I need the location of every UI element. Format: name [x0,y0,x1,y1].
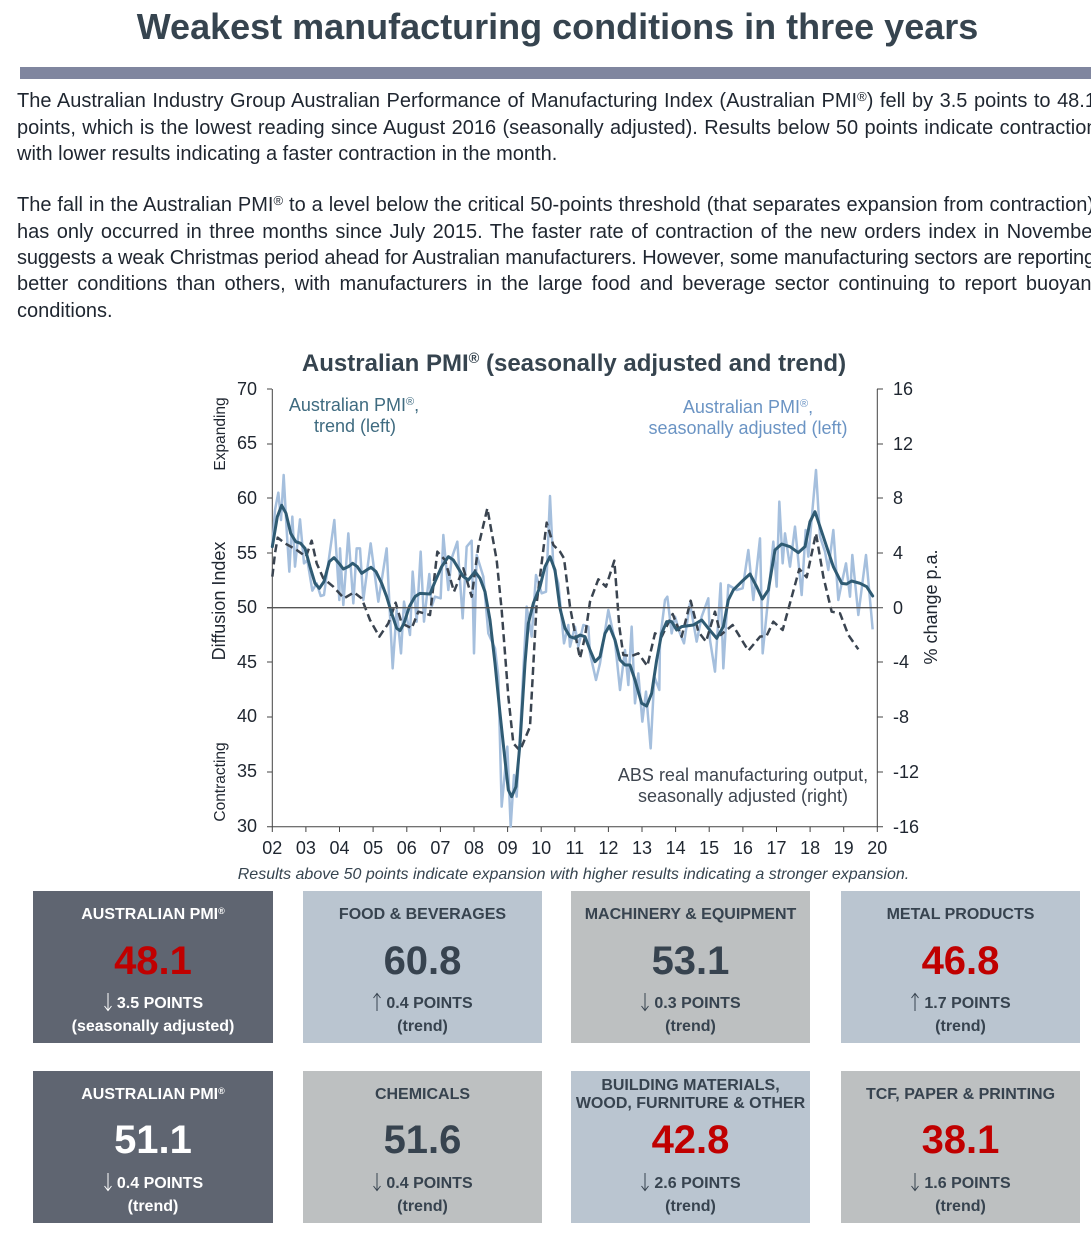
left axis labels: 35 [237,761,257,781]
series: seasonally adjusted PMI [272,470,873,827]
year axis labels: 05 [363,838,383,858]
card: Machinery & Equipment: MACHINERY & EQUIPMENT [585,906,796,923]
year axis labels: 06 [397,838,417,858]
card: Metal Products: 46.8 [922,939,999,983]
chart title: (seasonally adjusted and trend) [479,350,846,377]
year axis labels: 15 [699,838,719,858]
card: Chemicals: (trend) [397,1198,448,1215]
card: TCF, Paper & Printing: 1.6 POINTS [924,1175,1011,1192]
left axis labels: 40 [237,706,257,726]
text block: intro paragraph 1: points, which is the lowest reading since August 2016 (seasonally adjusted). Results below 50 points indicate contraction, [17,117,1091,139]
year axis labels: 13 [632,838,652,858]
left axis labels: 55 [237,543,257,563]
text block: intro paragraph 1 [17,89,1091,165]
card: Metal Products [841,891,1080,1043]
axis label: Contracting: Contracting [212,742,229,822]
right axis labels [893,379,919,837]
left axis labels: 30 [237,816,257,836]
card: TCF, Paper & Printing: TCF, PAPER & PRINTING [866,1086,1055,1103]
year axis labels: 16 [733,838,753,858]
left axis labels: 45 [237,652,257,672]
left axis labels: 60 [237,488,257,508]
right axis labels: -16 [893,817,919,837]
card: Australian PMI seasonally adjusted: 3.5 POINTS [117,995,203,1012]
right axis labels: -12 [893,762,919,782]
card: Australian PMI trend [33,1071,273,1223]
card: Machinery & Equipment: 53.1 [652,939,729,983]
year axis labels: 03 [296,838,316,858]
label: ABS output: seasonally adjusted (right) [638,786,848,806]
card: Machinery & Equipment: 0.3 POINTS [654,995,741,1012]
label: trend: , [414,395,419,415]
year axis labels: 11 [565,838,584,858]
header rule [20,67,1091,79]
card: Chemicals: 51.6 [384,1118,461,1162]
card: Chemicals: CHEMICALS [375,1086,470,1103]
right axis labels: 0 [893,598,903,618]
year axis labels: 20 [867,838,887,858]
text block: intro paragraph 1: The Australian Industry Group Australian Performance of Manufacturing Index (Australian PMI®) fell by 3.5 points to 48.1 [17,89,1091,112]
card: Chemicals [303,1071,542,1223]
card: Food & Beverages: 0.4 POINTS [386,995,473,1012]
chart axes [267,389,883,832]
series: ABS real manufacturing output (dashed) [272,508,858,751]
label: trend: trend (left) [314,416,396,436]
year axis labels: 10 [531,838,551,858]
year axis labels: 12 [598,838,618,858]
card: Machinery & Equipment [571,891,810,1043]
right axis labels: 4 [893,543,903,563]
label: ABS output: ABS real manufacturing output, [618,765,868,785]
label: trend: Australian PMI [289,395,419,415]
left axis labels: 70 [237,379,257,399]
left axis labels: 50 [237,597,257,617]
card: TCF, Paper & Printing: 38.1 [922,1118,999,1162]
card: Australian PMI trend: AUSTRALIAN PMI® [81,1086,225,1103]
card: TCF, Paper & Printing [841,1071,1080,1223]
chart footnote: Results above 50 points indicate expansion with higher results indicating a stronger expansion. [238,866,909,883]
card: TCF, Paper & Printing: (trend) [935,1198,986,1215]
card: Australian PMI seasonally adjusted: AUSTRALIAN PMI® [81,906,225,923]
chart title: ® [469,351,480,367]
year axis labels: 07 [430,838,450,858]
card: Building Materials: WOOD, FURNITURE & OTHER [576,1095,805,1112]
year axis labels: 17 [766,838,787,858]
50-point reference line [267,607,877,609]
card: Building Materials: 42.8 [652,1118,729,1162]
card: Food & Beverages: (trend) [397,1018,448,1035]
text block: intro paragraph 2: conditions. [17,300,113,322]
axis title: % change p.a.: % change p.a. [921,549,941,665]
year axis labels: 09 [498,838,518,858]
card: Australian PMI seasonally adjusted: 48.1 [114,939,192,983]
card: Australian PMI seasonally adjusted [33,891,273,1043]
year axis labels: 08 [464,838,484,858]
card: Building Materials [571,1071,810,1223]
year axis labels: 19 [834,838,854,858]
year axis labels: 02 [262,838,282,858]
year axis labels: 18 [800,838,820,858]
label: seasonally adjusted: Australian PMI [683,397,813,417]
label: seasonally adjusted: ® [800,398,808,410]
right axis labels: -4 [893,652,909,672]
year axis labels [262,838,887,858]
title: Weakest manufacturing conditions in three years [137,6,978,47]
series: PMI trend [272,505,873,797]
text block: intro paragraph 2 [17,193,1091,322]
card: Food & Beverages: FOOD & BEVERAGES [339,906,506,923]
card: Building Materials: (trend) [665,1198,716,1215]
year axis labels: 04 [329,838,350,858]
text block: intro paragraph 2: better conditions than others, with manufacturers in the large food and beverage sector continuing to report buoyant [17,273,1091,295]
chart title: Australian PMI [302,350,469,377]
left axis labels: 65 [237,433,257,453]
axis title: Diffusion Index: Diffusion Index [209,542,229,660]
chart: Australian PMI line chart [209,350,941,883]
card: Australian PMI trend: (trend) [128,1198,178,1215]
text block: intro paragraph 2: The fall in the Australian PMI® to a level below the critical 50-points threshold (that separates expansion from contraction) [17,193,1091,216]
card: Building Materials: BUILDING MATERIALS, [601,1077,780,1094]
text block: intro paragraph 2: has only occurred in three months since July 2015. The faster rate of contraction of the new orders index in November [17,221,1091,243]
card: Metal Products: (trend) [935,1018,986,1035]
card: Australian PMI trend: 0.4 POINTS [117,1175,203,1192]
right axis labels: 8 [893,488,903,508]
text block: intro paragraph 2: suggests a weak Christmas period ahead for Australian manufacturers. However, some manufacturing sectors are reporting [17,247,1091,269]
card: Food & Beverages: 60.8 [384,939,461,983]
card: Building Materials: 2.6 POINTS [654,1175,741,1192]
label: trend: ® [406,396,414,408]
label: seasonally adjusted: seasonally adjusted (left) [648,418,848,438]
card: Chemicals: 0.4 POINTS [386,1175,473,1192]
year axis labels: 14 [666,838,686,858]
card: Metal Products: METAL PRODUCTS [887,906,1034,923]
text block: intro paragraph 1: with lower results indicating a faster contraction in the month. [17,143,557,165]
axis label: Expanding: Expanding [212,397,229,471]
card: Australian PMI trend: 51.1 [114,1118,192,1162]
label: seasonally adjusted: , [808,397,813,417]
card: Machinery & Equipment: (trend) [665,1018,716,1035]
right axis labels: 16 [893,379,913,399]
right axis labels: 12 [893,434,913,454]
right axis labels: -8 [893,707,909,727]
card: Australian PMI seasonally adjusted: (seasonally adjusted) [72,1018,234,1035]
card: Food & Beverages [303,891,542,1043]
left axis labels [237,379,257,836]
card: Metal Products: 1.7 POINTS [924,995,1011,1012]
